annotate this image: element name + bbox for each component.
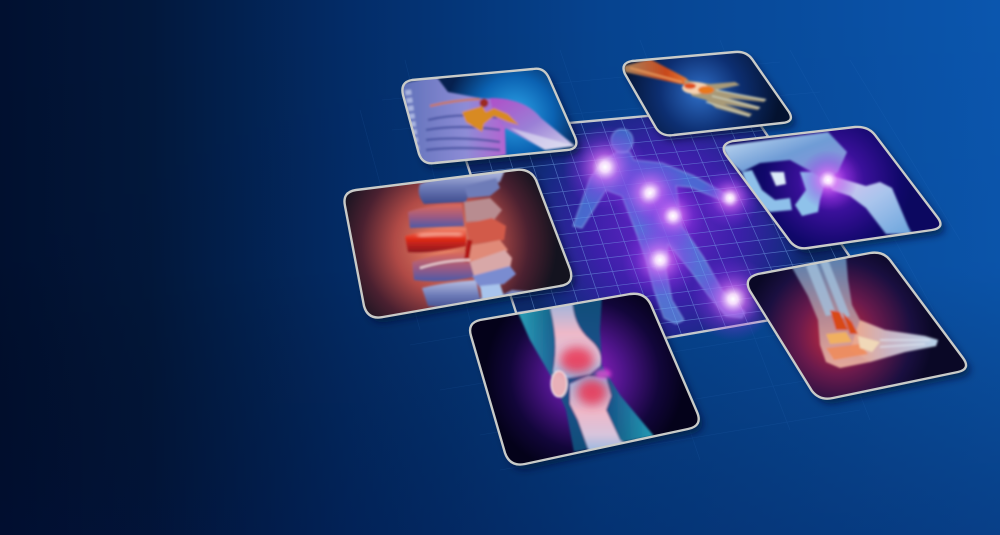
card: wrist [615,45,800,145]
hand [684,80,766,117]
pain glow points on body [563,125,775,341]
vertebrae [419,170,505,204]
panel: central body grid [465,114,850,339]
lower leg and foot [791,258,871,370]
leg outline teal [516,296,654,452]
femur [824,174,912,234]
pelvis right ischium [795,172,826,216]
patella [551,371,567,397]
card: hip [715,120,950,255]
femur [548,296,601,378]
card: spine [340,165,580,325]
shoulder torso [404,78,508,162]
leg bones [806,260,850,318]
body: head [611,129,633,153]
pelvis left ischium [742,170,792,212]
panel grid lines [471,118,840,334]
knee pain glows [560,347,594,373]
panel border [457,107,880,361]
pelvis [722,132,847,180]
card: ankle [740,245,975,405]
spine highlight [418,233,462,236]
spinal processes [464,178,500,198]
shoulder arm [490,98,575,150]
card: knee [460,285,710,475]
ankle bones in pain [830,310,858,334]
wrist pain [682,82,708,94]
faint background grid [360,40,960,470]
hip pain glow [802,152,856,206]
forearm bones [624,60,690,86]
human body figure [573,129,745,324]
tibia [570,376,628,454]
shoulder joint pain [480,98,488,108]
card: shoulder [400,60,585,170]
